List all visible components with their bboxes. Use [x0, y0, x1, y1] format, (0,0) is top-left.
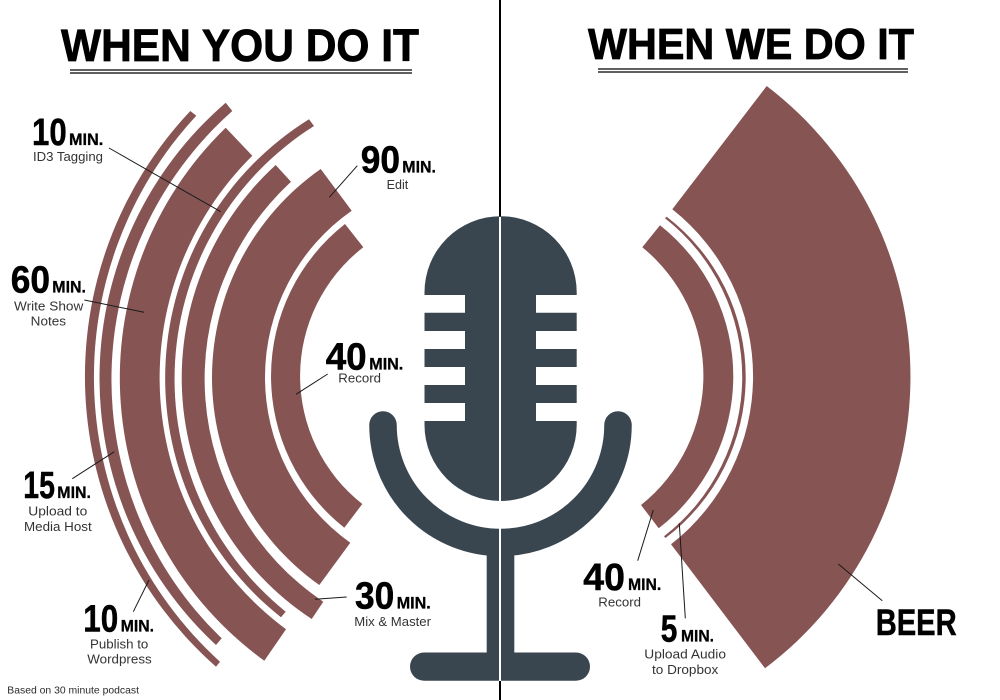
label: 60 min write show notes: Write Show — [14, 300, 84, 314]
label: 60 min write show notes: MIN. — [52, 279, 86, 297]
label: beer — [838, 564, 957, 643]
center divider line — [499, 0, 501, 700]
label: 10 min publish to wordpress: Wordpress — [87, 652, 152, 666]
arc: id3 tagging 10 min — [165, 119, 314, 617]
label: 90 min edit: MIN. — [402, 159, 436, 177]
label: 5 min upload audio to dropbox: to Dropbox — [652, 663, 719, 677]
arc: publish to wordpress 10 min — [85, 111, 220, 667]
label: 5 min upload audio to dropbox: 5 — [661, 609, 677, 651]
label: 40 min record right: Record — [598, 596, 641, 610]
label: 40 min record right — [583, 510, 661, 610]
label: 10 min publish to wordpress — [83, 580, 154, 666]
label: 10 min publish to wordpress: MIN. — [121, 618, 154, 636]
label: beer: BEER — [876, 602, 957, 643]
label: 10 min publish to wordpress: 10 — [83, 599, 118, 641]
label: 40 min record left: Record — [338, 372, 381, 386]
microphone right slots — [536, 295, 578, 421]
arc: write show notes 60 min — [120, 128, 286, 661]
arc: upload to media host 15 min — [100, 103, 232, 645]
label: 30 min mix and master — [315, 575, 431, 629]
icon: microphone — [383, 216, 618, 681]
label: 10 min id3 tagging: 10 — [32, 112, 67, 154]
label: 10 min publish to wordpress: Publish to — [90, 637, 148, 651]
arc: record 40 min — [271, 224, 363, 528]
label: 30 min mix and master: 30 — [355, 575, 394, 617]
label: 5 min upload audio to dropbox — [644, 523, 726, 677]
label: 5 min upload audio to dropbox: Upload Audio — [644, 647, 726, 661]
label: 15 min upload to media host: MIN. — [57, 484, 91, 502]
label: 90 min edit: 90 — [361, 140, 400, 182]
microphone cradle — [383, 425, 618, 542]
microphone center split — [499, 217, 501, 681]
label: 40 min record left — [296, 336, 403, 394]
label: 40 min record right: MIN. — [628, 576, 661, 594]
label: 60 min write show notes — [11, 260, 144, 329]
microphone stem — [487, 540, 514, 660]
label: 60 min write show notes: 60 — [11, 260, 50, 302]
label: 60 min write show notes: Notes — [31, 315, 66, 329]
label: 30 min mix and master: Mix & Master — [354, 615, 431, 629]
arc: beer — [671, 86, 910, 668]
footnote: Based on 30 minute podcast — [7, 685, 139, 696]
label: 15 min upload to media host: Upload to — [28, 505, 87, 519]
arc: edit 90 min — [212, 169, 352, 585]
label: 90 min edit: Edit — [387, 178, 409, 192]
title: when we do it: WHEN WE DO IT — [588, 20, 914, 69]
arc: mix and master 30 min — [182, 165, 323, 619]
label: 15 min upload to media host — [23, 452, 114, 534]
label: 30 min mix and master: MIN. — [397, 594, 431, 612]
label: 40 min record left: 40 — [326, 336, 367, 378]
label: 40 min record left: MIN. — [369, 356, 403, 374]
label: 15 min upload to media host: Media Host — [24, 520, 92, 534]
chart: when we do it arcs — [641, 86, 910, 668]
title: when you do it: WHEN YOU DO IT — [61, 20, 419, 71]
microphone base — [410, 652, 590, 681]
label: 90 min edit — [329, 140, 436, 197]
label: 5 min upload audio to dropbox: MIN. — [681, 628, 714, 646]
microphone head — [424, 216, 577, 501]
label: 10 min id3 tagging: ID3 Tagging — [33, 150, 103, 164]
label: 10 min id3 tagging: MIN. — [69, 131, 103, 149]
chart: when you do it arcs — [85, 103, 363, 667]
label: 10 min id3 tagging — [32, 112, 221, 212]
arc: upload audio to dropbox 5 min — [664, 217, 746, 538]
microphone left slots — [424, 295, 465, 421]
arc: record 40 min — [641, 225, 733, 528]
label: 15 min upload to media host: 15 — [23, 465, 55, 507]
label: 40 min record right: 40 — [583, 557, 625, 599]
